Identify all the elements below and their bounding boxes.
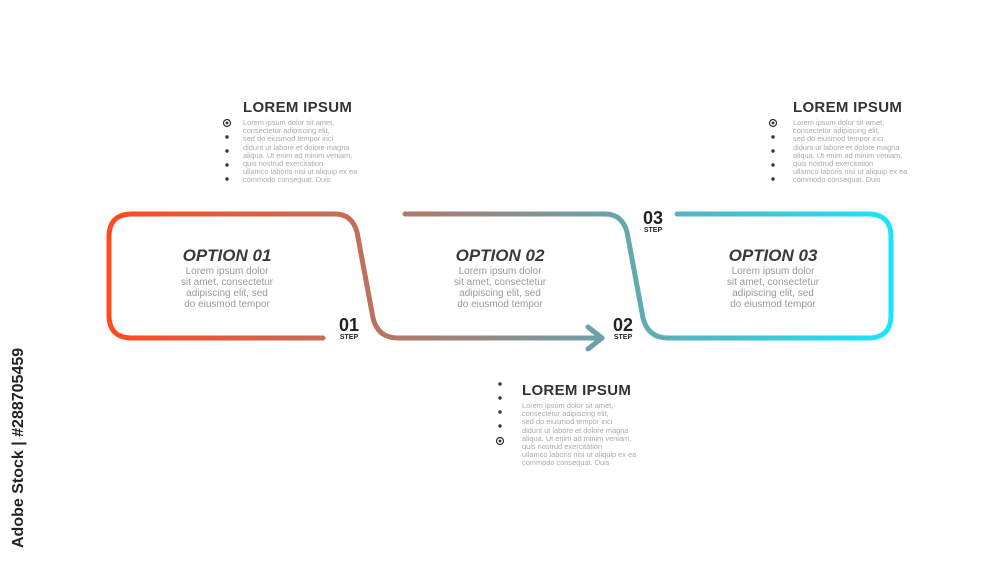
step 02: 02	[613, 315, 633, 335]
step 02: STEP	[614, 334, 632, 341]
block 3: aliqua. Ut enim ad minim veniam,	[793, 151, 902, 160]
block 3: ullamco laboris nisi ut aliquip ex ea	[793, 167, 907, 176]
block 2: didunt ut labore et dolore magna	[522, 426, 628, 435]
option 03: Lorem ipsum dolor	[732, 266, 814, 277]
block 1: aliqua. Ut enim ad minim veniam,	[243, 151, 352, 160]
block 2	[496, 382, 636, 467]
option 01	[181, 246, 273, 310]
watermark text: Adobe Stock | #288705459	[10, 348, 27, 548]
block 2: Lorem ipsum dolor sit amet,	[522, 401, 613, 410]
block 1: didunt ut labore et dolore magna	[243, 143, 349, 152]
block 3	[768, 99, 908, 184]
block 1: sed do eiusmod tempor inci	[243, 134, 333, 143]
block 3: Lorem ipsum dolor sit amet,	[793, 118, 884, 127]
step 01: 01	[339, 315, 359, 335]
option 03: OPTION 03	[729, 246, 817, 265]
option 01: sit amet, consectetur	[181, 277, 273, 288]
option 02	[454, 246, 546, 310]
step 03: 03	[643, 208, 663, 228]
option 02: do eiusmod tempor	[457, 299, 543, 310]
step 03: STEP	[644, 227, 662, 234]
option 03	[727, 246, 819, 310]
option 02: OPTION 02	[456, 246, 544, 265]
option 01: do eiusmod tempor	[184, 299, 270, 310]
block 2: LOREM IPSUM	[522, 382, 631, 399]
option 01: Lorem ipsum dolor	[186, 266, 268, 277]
block 3: LOREM IPSUM	[793, 99, 902, 116]
block 2: aliqua. Ut enim ad minim veniam,	[522, 434, 631, 443]
option 02: sit amet, consectetur	[454, 277, 546, 288]
option 01: OPTION 01	[183, 246, 271, 265]
block 1: quis nostrud exercitation	[243, 159, 323, 168]
step 01: STEP	[340, 334, 358, 341]
option 03: sit amet, consectetur	[727, 277, 819, 288]
block 3: didunt ut labore et dolore magna	[793, 143, 899, 152]
block 1: LOREM IPSUM	[243, 99, 352, 116]
block 1: Lorem ipsum dolor sit amet,	[243, 118, 334, 127]
block 2: consectetur adipiscing elit,	[522, 409, 609, 418]
block 1	[222, 99, 358, 184]
option 03: do eiusmod tempor	[730, 299, 816, 310]
block 3: sed do eiusmod tempor inci	[793, 134, 883, 143]
option 01: adipiscing elit, sed	[186, 288, 268, 299]
block 1: consectetur adipiscing elit,	[243, 126, 330, 135]
block 2: quis nostrud exercitation	[522, 442, 602, 451]
block 2: ullamco laboris nisi ut aliquip ex ea	[522, 450, 636, 459]
block 3: quis nostrud exercitation	[793, 159, 873, 168]
block 2: sed do eiusmod tempor inci	[522, 417, 612, 426]
option 03: adipiscing elit, sed	[732, 288, 814, 299]
block 1: commodo consequat. Duis	[243, 175, 331, 184]
block 3: consectetur adipiscing elit,	[793, 126, 880, 135]
block 1: ullamco laboris nisi ut aliquip ex ea	[243, 167, 357, 176]
block 3: commodo consequat. Duis	[793, 175, 881, 184]
option 02: Lorem ipsum dolor	[459, 266, 541, 277]
option 02: adipiscing elit, sed	[459, 288, 541, 299]
block 2: commodo consequat. Duis	[522, 458, 610, 467]
